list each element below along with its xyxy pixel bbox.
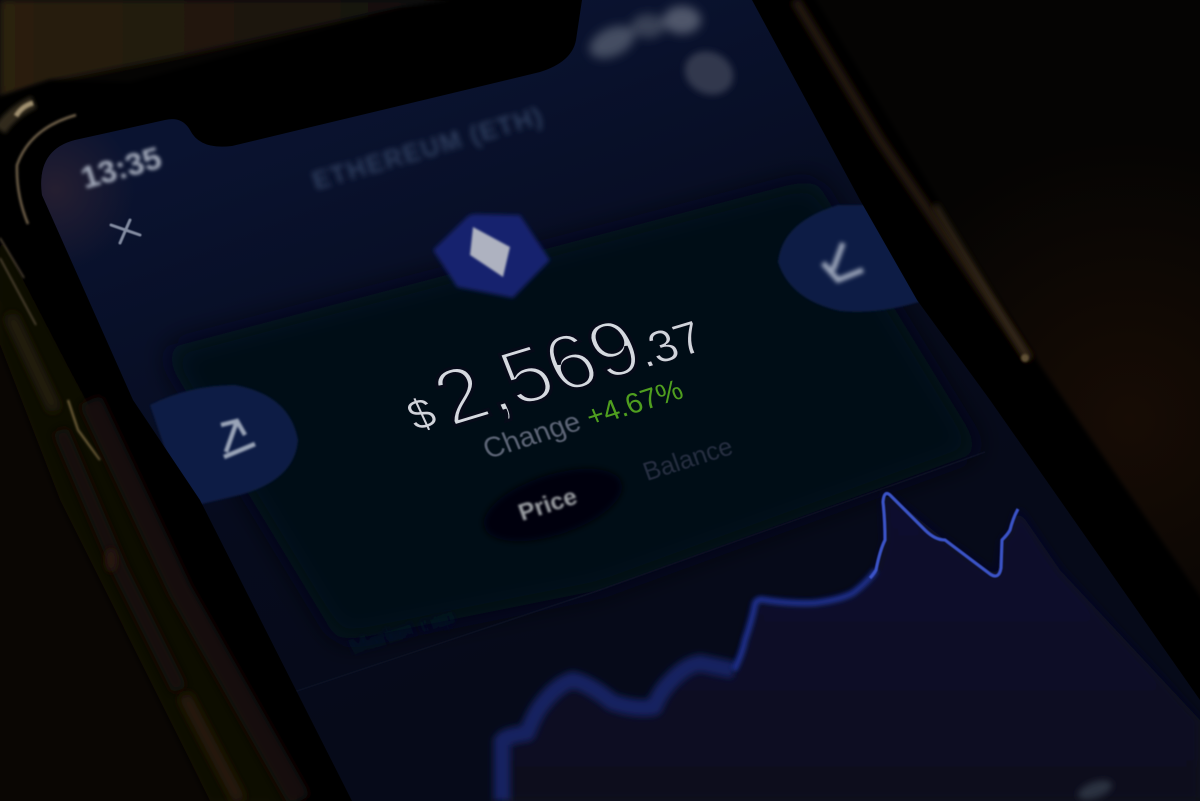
price value: 2,569 xyxy=(420,302,656,443)
phone metal edge right xyxy=(795,0,1030,362)
chart baseline xyxy=(297,452,985,690)
price change xyxy=(484,380,683,458)
price value: .37 xyxy=(627,311,712,377)
blurred corner label xyxy=(1075,776,1115,801)
phone metal edge left xyxy=(0,102,300,801)
chart area xyxy=(516,496,1194,766)
price value xyxy=(408,320,694,430)
send button xyxy=(150,385,298,508)
price change: Change xyxy=(478,406,586,465)
status bar time: 13:35 xyxy=(76,139,166,196)
dark price panel xyxy=(162,174,889,550)
tab: price xyxy=(484,468,622,542)
receive button xyxy=(778,205,925,312)
icon: close xyxy=(111,220,140,243)
chart line: soft left xyxy=(502,663,734,801)
chart line: middle xyxy=(734,570,876,670)
settings icon xyxy=(682,48,736,98)
chart line: sharp right xyxy=(870,494,1018,578)
icon: ethereum hexagon xyxy=(433,214,550,298)
icon: down arrow xyxy=(823,243,863,280)
price change: +4.67% xyxy=(581,374,688,433)
price line chart xyxy=(502,493,1200,801)
tab: price: Price xyxy=(515,483,581,527)
title: ETHEREUM (ETH) xyxy=(309,102,547,196)
price value: $ xyxy=(400,389,444,440)
status bar icons xyxy=(584,6,701,65)
chart label: Market cap xyxy=(346,604,458,660)
tab: balance: Balance xyxy=(640,433,737,487)
icon: up arrow xyxy=(221,421,255,457)
